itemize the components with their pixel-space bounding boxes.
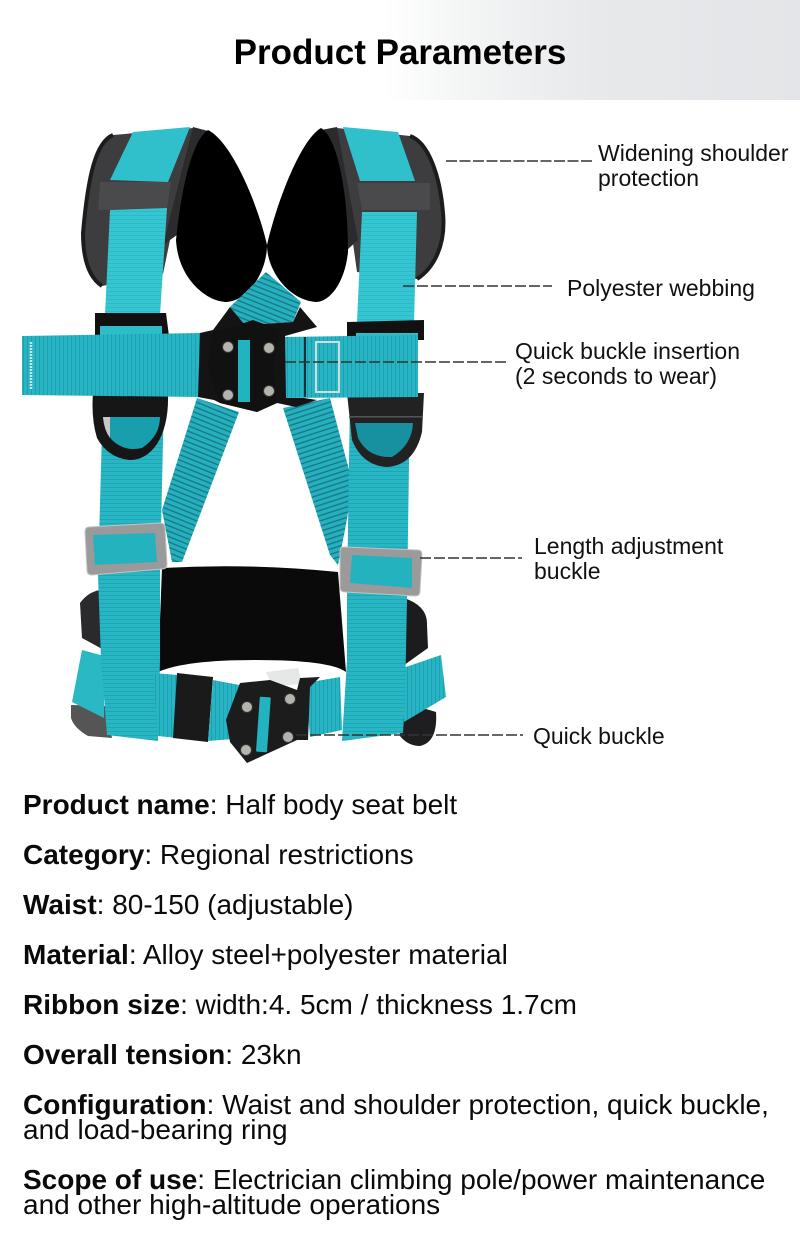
spec: waist: Waist: 80-150 (adjustable)	[23, 889, 353, 920]
label: buckle insertion	[515, 338, 740, 389]
right end webbing	[403, 655, 446, 722]
buckle backing	[266, 668, 302, 686]
left shoulder pad	[83, 127, 208, 315]
spec: scope of use: and other high-altitude operations	[23, 1189, 440, 1220]
right waist pad	[400, 598, 428, 668]
label: quick buckle: Quick buckle	[533, 723, 665, 749]
label: shoulder protection: Widening shoulder	[598, 140, 789, 166]
label: adjustment buckle: buckle	[534, 558, 600, 584]
right shoulder inner pad	[267, 128, 348, 302]
spec: product name: Product name: Half body seat belt	[23, 789, 457, 820]
label: shoulder protection: protection	[598, 165, 699, 191]
label: shoulder protection	[598, 140, 789, 191]
spec: material: Material: Alloy steel+polyester material	[23, 939, 508, 970]
quick buckle lower	[226, 677, 320, 763]
centre yoke webbing	[230, 272, 301, 325]
left adjustment buckle	[85, 523, 167, 575]
right adjustment buckle	[340, 547, 422, 596]
leader: webbing	[403, 285, 552, 287]
left waist pad	[80, 590, 104, 650]
spec: configuration	[23, 1089, 769, 1145]
label: buckle insertion: (2 seconds to wear)	[515, 363, 717, 389]
front belt mid segment	[208, 680, 250, 741]
spec: scope of use: Scope of use: Electrician climbing pole/power maintenance	[23, 1164, 765, 1195]
waist back pad	[158, 566, 346, 672]
right shoulder pad	[321, 127, 443, 324]
right upper loop	[347, 320, 424, 340]
left upper loop	[95, 313, 169, 336]
left shoulder inner pad	[176, 130, 267, 302]
label: adjustment buckle: Length adjustment	[534, 533, 723, 559]
harness illustration	[22, 127, 592, 763]
leader: adjustment buckle	[420, 557, 522, 559]
left vertical strap	[98, 396, 164, 741]
label: buckle insertion: Quick buckle insertion	[515, 338, 740, 364]
belt slider	[173, 673, 213, 742]
leader: quick buckle	[296, 734, 523, 736]
left D ring	[92, 393, 168, 460]
header band	[0, 0, 800, 100]
chest quick buckle	[198, 307, 317, 412]
right D ring	[347, 393, 424, 467]
front belt left segment	[153, 673, 178, 738]
left lower pad	[71, 705, 112, 738]
left end webbing	[72, 650, 104, 718]
left diagonal strap	[162, 398, 239, 562]
leader: shoulder protection	[446, 160, 594, 162]
left chest strap	[22, 333, 200, 397]
label: adjustment buckle	[534, 533, 724, 584]
right vertical strap	[342, 396, 410, 741]
spec: ribbon size: Ribbon size: width:4. 5cm / thickness 1.7cm	[23, 989, 577, 1020]
title: Product Parameters	[234, 33, 566, 72]
right lower pad	[396, 700, 436, 746]
label: webbing: Polyester webbing	[567, 275, 755, 301]
spec: configuration: and load-bearing ring	[23, 1114, 288, 1145]
right chest strap	[285, 335, 418, 398]
right diagonal strap	[283, 398, 353, 565]
spec: category: Category: Regional restrictions	[23, 839, 414, 870]
leader: buckle insertion	[285, 361, 508, 363]
spec: overall tension: Overall tension: 23kn	[23, 1039, 302, 1070]
front belt right segment	[305, 677, 342, 737]
spec: scope of use	[23, 1164, 765, 1220]
spec: configuration: Configuration: Waist and shoulder protection, quick buckle,	[23, 1089, 769, 1120]
